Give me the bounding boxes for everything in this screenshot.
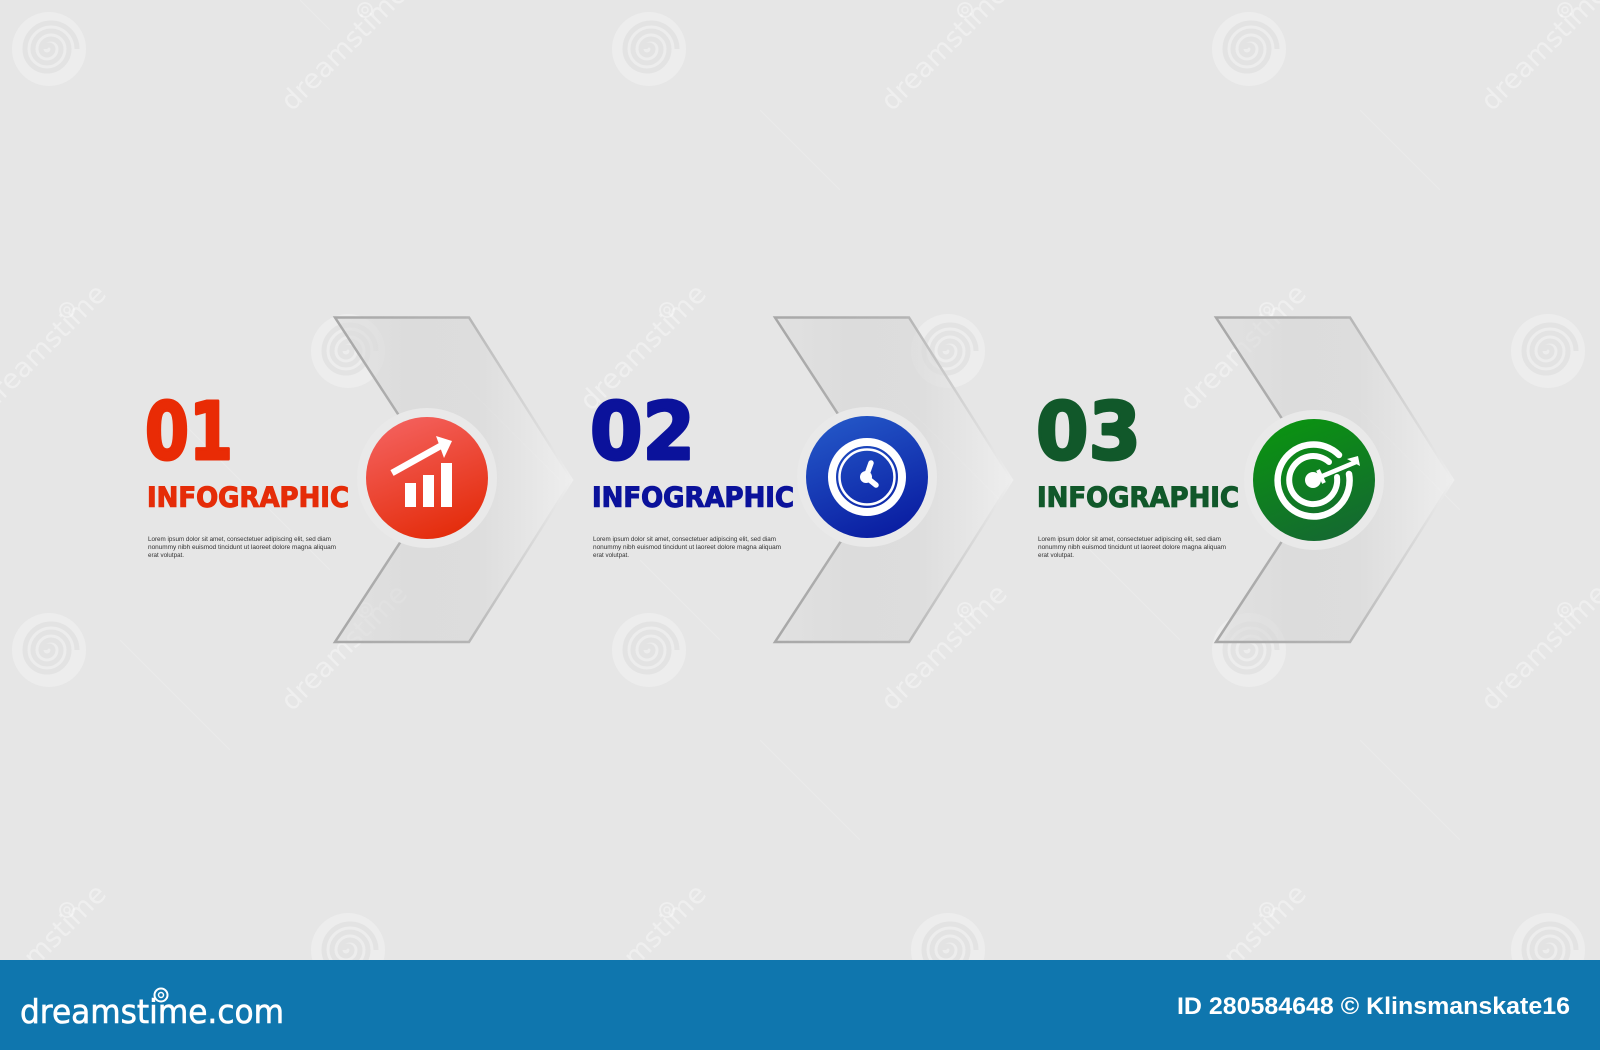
watermark pattern: dreamstime bbox=[574, 278, 713, 417]
watermark pattern: dreamstime bbox=[1174, 878, 1313, 1017]
heading 03: INFOGRAPHIC bbox=[1037, 482, 1239, 514]
footer logo: dreamstime.com bbox=[20, 992, 284, 1031]
watermark pattern: dreamstime bbox=[1174, 278, 1313, 417]
body text 03 bbox=[1038, 536, 1226, 559]
heading 02: INFOGRAPHIC bbox=[592, 482, 794, 514]
chevron arrow 02 bbox=[775, 318, 1012, 642]
body text 01: Lorem ipsum dolor sit amet, consectetuer adipiscing elit, sed diam bbox=[148, 536, 331, 543]
icon badge 03: target with dart bbox=[1244, 410, 1384, 550]
panel: step 03 bbox=[1036, 318, 1453, 642]
body text 01: erat volutpat. bbox=[148, 552, 184, 559]
icon badge 02: clock bbox=[797, 407, 937, 547]
watermark pattern: dreamstime bbox=[875, 578, 1014, 717]
body text 01: nonummy nibh euismod tincidunt ut laoreet dolore magna aliquam bbox=[148, 544, 336, 551]
watermark pattern: dreamstime bbox=[275, 578, 414, 717]
body text 01 bbox=[148, 536, 336, 559]
footer credit: ID 280584648 © Klinsmanskate16 bbox=[1177, 993, 1570, 1020]
body text 02: erat volutpat. bbox=[593, 552, 629, 559]
panel: step 02 bbox=[590, 318, 1012, 642]
body text 03: nonummy nibh euismod tincidunt ut laoreet dolore magna aliquam bbox=[1038, 544, 1226, 551]
watermark pattern: dreamstime bbox=[574, 878, 713, 1017]
body text 02: nonummy nibh euismod tincidunt ut laoreet dolore magna aliquam bbox=[593, 544, 781, 551]
footer bar bbox=[0, 960, 1600, 1050]
chevron arrow 01 bbox=[335, 318, 572, 642]
number 03: 03 bbox=[1036, 386, 1141, 478]
icon badge 01: rising bar chart bbox=[357, 408, 497, 548]
heading 01: INFOGRAPHIC bbox=[147, 482, 349, 514]
body text 02: Lorem ipsum dolor sit amet, consectetuer adipiscing elit, sed diam bbox=[593, 536, 776, 543]
number 01: 01 bbox=[145, 386, 233, 478]
number 02: 02 bbox=[590, 386, 695, 478]
panel: step 01 bbox=[145, 318, 572, 642]
body text 03: erat volutpat. bbox=[1038, 552, 1074, 559]
body text 03: Lorem ipsum dolor sit amet, consectetuer adipiscing elit, sed diam bbox=[1038, 536, 1221, 543]
chevron arrow 03 bbox=[1216, 318, 1453, 642]
body text 02 bbox=[593, 536, 781, 559]
